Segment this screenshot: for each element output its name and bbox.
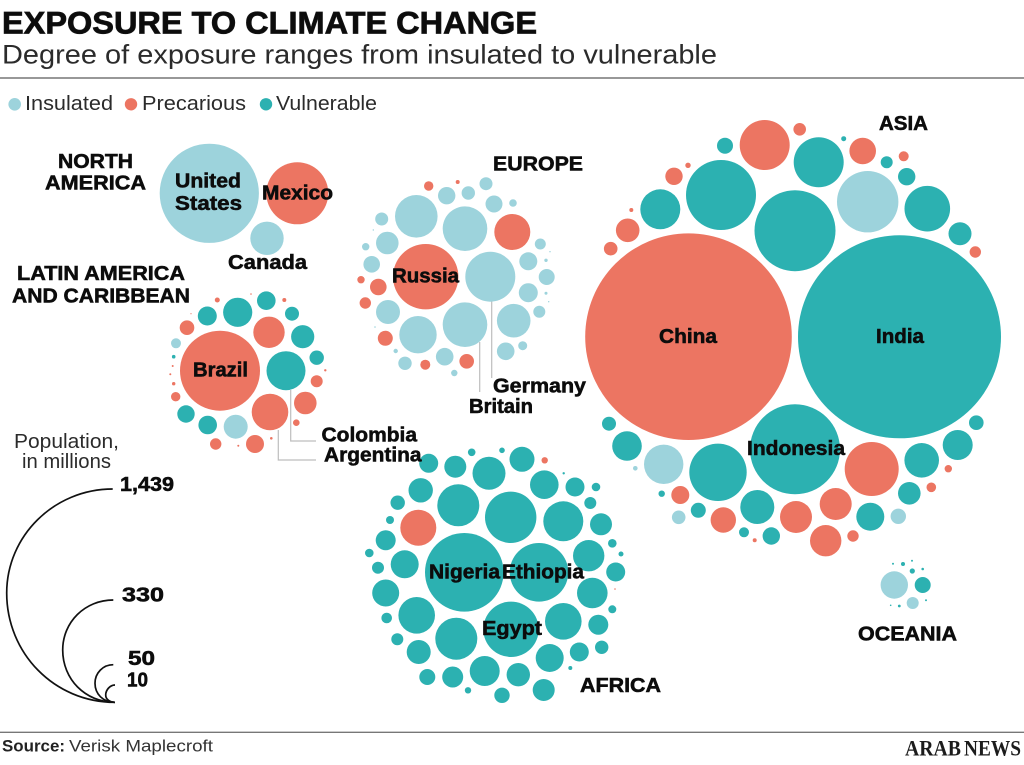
bubble: Germany: Germany <box>493 376 587 398</box>
bubble: Indonesia <box>747 404 846 494</box>
arc: 50: 50 <box>128 648 155 670</box>
bubble: Egypt <box>482 602 542 657</box>
bubble: United States <box>160 144 259 243</box>
scale caption <box>14 431 119 473</box>
bubble: Ethiopia: Ethiopia <box>502 561 585 583</box>
source: Source: <box>2 737 65 756</box>
bubble: Britain <box>443 302 533 418</box>
bubble: Colombia <box>266 351 418 447</box>
population size scale <box>7 431 174 702</box>
bubble: Germany <box>465 252 587 398</box>
arc: 10: 10 <box>127 670 148 692</box>
panel: Latin America and Caribbean <box>12 263 418 460</box>
insulated countries <box>881 571 919 609</box>
legend <box>8 93 377 115</box>
bubble: India: India <box>876 326 925 348</box>
heading: Africa: AFRICA <box>580 675 661 697</box>
bubble: Canada <box>228 222 308 274</box>
heading: North America: AMERICA <box>45 172 146 194</box>
bubble: India <box>798 235 1001 438</box>
leader lines <box>480 300 492 392</box>
precarious countries <box>169 293 326 453</box>
heading: Europe: EUROPE <box>493 154 583 176</box>
heading: Latin America and Caribbean: AND CARIBBEAN <box>12 285 190 307</box>
panel: Africa <box>365 447 661 703</box>
insulated countries <box>362 177 555 376</box>
legend item: vulnerable: Vulnerable <box>276 93 377 115</box>
bubble: Canada: Canada <box>228 252 308 274</box>
logo: Arab News: ARAB <box>905 736 961 761</box>
panel: Oceania <box>858 560 957 646</box>
precarious countries <box>400 457 616 590</box>
bubble: Mexico <box>262 162 333 224</box>
vulnerable countries <box>890 560 931 607</box>
bubble: Mexico: Mexico <box>262 182 333 204</box>
panel: Europe <box>357 154 587 418</box>
bubble: United States: United <box>175 171 241 193</box>
bubble: China <box>585 233 792 440</box>
source <box>2 737 213 756</box>
bubble: Argentina: Argentina <box>324 445 422 467</box>
bubble: Nigeria <box>425 533 504 612</box>
title: EXPOSURE TO CLIMATE CHANGE <box>2 4 537 40</box>
heading: North America: NORTH <box>58 151 133 173</box>
panel: North America <box>45 144 333 274</box>
scale caption: in millions <box>22 451 111 473</box>
precarious countries <box>357 180 530 370</box>
bubble: Brazil <box>180 331 260 411</box>
legend item: insulated: Insulated <box>25 93 113 115</box>
legend item: precarious: Precarious <box>142 93 246 115</box>
heading: North America <box>45 151 146 194</box>
vulnerable countries <box>602 136 984 545</box>
bubble: Argentina <box>252 394 422 467</box>
insulated countries <box>171 338 248 439</box>
bubble: Britain: Britain <box>469 396 533 418</box>
bubble: Egypt: Egypt <box>482 618 542 640</box>
scale caption: Population, <box>14 431 119 453</box>
arc: 1,439 <box>7 474 174 702</box>
subtitle: Degree of exposure ranges from insulated to vulnerable <box>2 39 717 69</box>
arc: 10 <box>106 670 148 702</box>
precarious countries <box>604 120 981 556</box>
bubble: Brazil: Brazil <box>193 360 248 382</box>
heading: Latin America and Caribbean: LATIN AMERICA <box>17 263 185 285</box>
bubble: United States: States <box>175 193 242 215</box>
logo: Arab News <box>905 736 1021 761</box>
bubble: Ethiopia <box>502 543 585 602</box>
source: Verisk Maplecroft <box>69 737 213 756</box>
heading: Latin America and Caribbean <box>12 263 190 307</box>
bubble: Russia: Russia <box>392 266 460 288</box>
arc: 1,439: 1,439 <box>120 474 174 496</box>
heading: Oceania: OCEANIA <box>858 624 957 646</box>
bubble: Colombia: Colombia <box>322 425 418 447</box>
vulnerable countries <box>172 291 324 434</box>
arc: 330: 330 <box>122 585 164 607</box>
heading: Asia: ASIA <box>879 113 928 135</box>
insulated countries <box>633 171 906 524</box>
bubble: China: China <box>659 326 718 348</box>
panel: Asia <box>585 113 1001 556</box>
bubble: Indonesia: Indonesia <box>747 438 846 460</box>
bubble: Nigeria: Nigeria <box>429 561 501 583</box>
arc: 330 <box>63 585 164 702</box>
arc: 50 <box>95 648 155 702</box>
vulnerable countries <box>365 447 625 703</box>
bubble: Russia <box>392 244 460 309</box>
leader lines <box>278 390 316 460</box>
